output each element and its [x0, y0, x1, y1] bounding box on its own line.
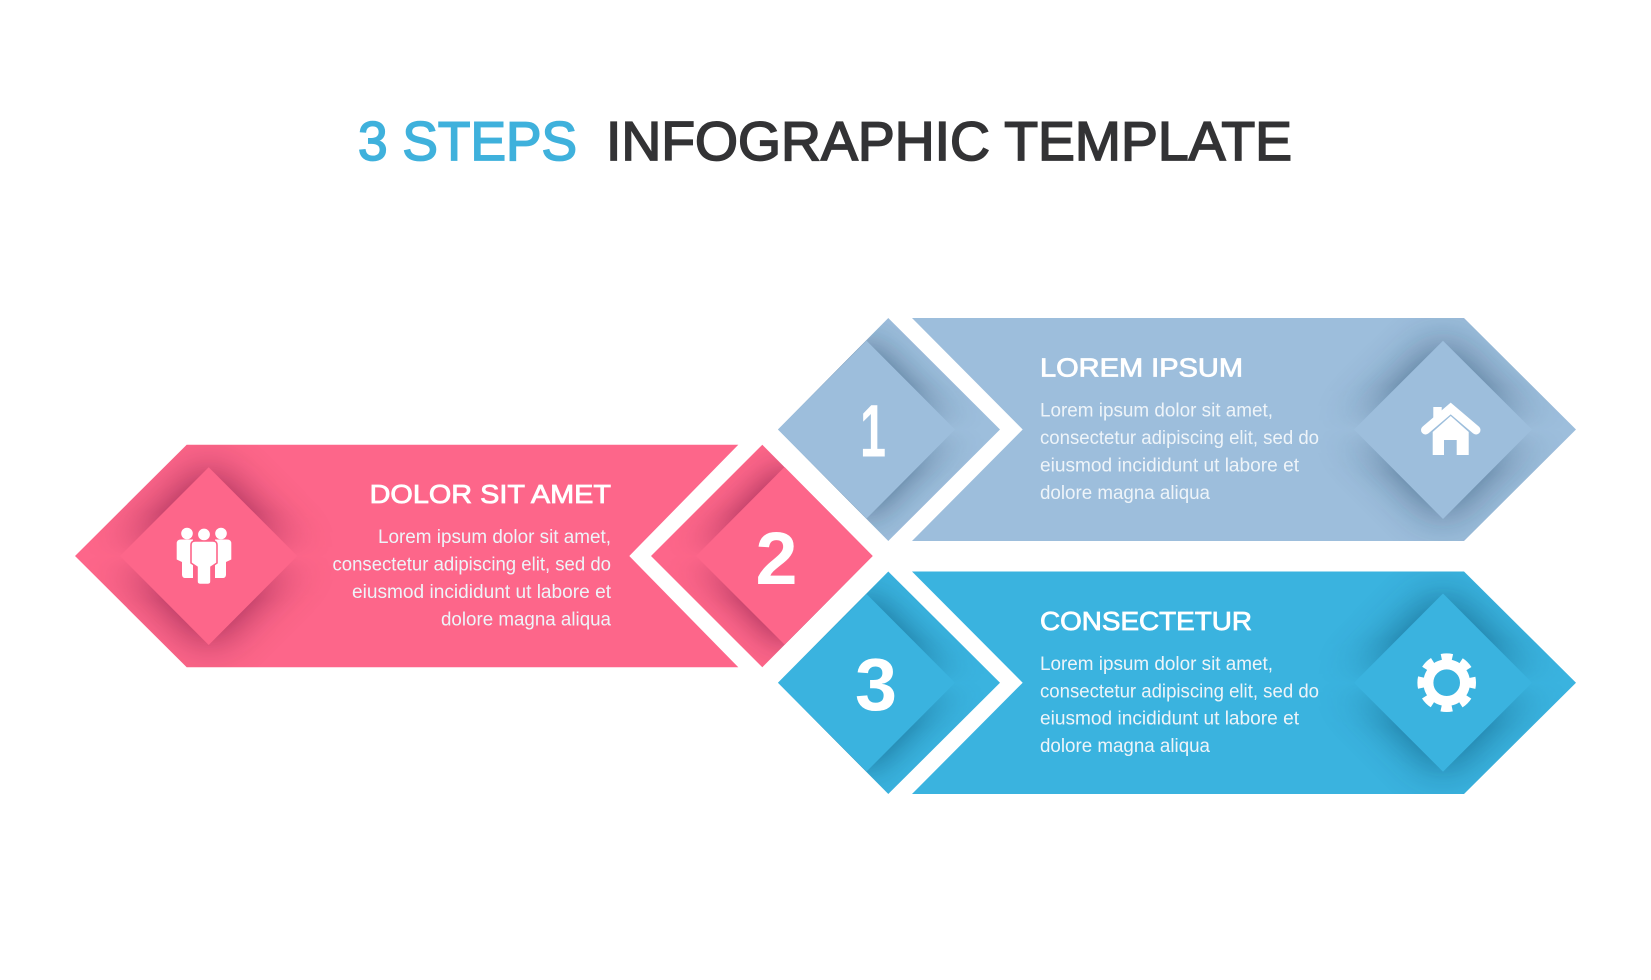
text block: step 2: dolore magna aliqua	[441, 609, 611, 630]
text block: step 3: dolore magna aliqua	[1040, 736, 1210, 757]
icon diamond: step 1	[1354, 341, 1532, 519]
heading: dolor sit amet: DOLOR SIT AMET	[370, 479, 611, 509]
text block: step 2: eiusmod incididunt ut labore et	[352, 582, 612, 603]
inner number diamond: step 3	[778, 594, 955, 772]
number diamond: step 1	[778, 318, 1000, 541]
shadow: step 2 number diamond shadow	[696, 467, 873, 644]
band: step 2 arrow	[75, 445, 738, 667]
text block: step 1: dolore magna aliqua	[1040, 483, 1210, 504]
text block: step 3: Lorem ipsum dolor sit amet,	[1040, 654, 1273, 675]
icon diamond: step 2	[120, 467, 297, 645]
shadow: step 1 number diamond shadow	[778, 341, 955, 518]
heading: consectetur: CONSECTETUR	[1040, 606, 1252, 636]
panel: step 1 lorem ipsum	[778, 318, 1576, 541]
panel: step 2 dolor sit amet	[75, 445, 873, 667]
icon: people	[177, 528, 231, 584]
icon: gear	[1421, 657, 1472, 708]
title: 3 steps: 3 STEPS	[358, 110, 577, 172]
inner number diamond: step 2	[696, 467, 873, 644]
number 2: 2	[756, 517, 798, 600]
text block: step 3: consectetur adipiscing elit, sed do	[1040, 681, 1319, 702]
number 1: 1	[860, 390, 886, 473]
text block: step 1: eiusmod incididunt ut labore et	[1040, 456, 1300, 476]
number diamond: step 2	[651, 445, 873, 667]
band: step 1 arrow	[912, 318, 1576, 541]
band: step 3 arrow	[912, 572, 1576, 794]
shadow: step 3 number diamond shadow	[778, 594, 955, 772]
text block: step 1	[1040, 401, 1319, 504]
heading: lorem ipsum: LOREM IPSUM	[1040, 353, 1243, 383]
icon: house	[1426, 407, 1476, 455]
text block: step 2: consectetur adipiscing elit, sed do	[332, 555, 611, 576]
shadow: step 1 icon diamond shadow	[1354, 341, 1532, 519]
text block: step 1: consectetur adipiscing elit, sed do	[1040, 428, 1319, 449]
text block: step 1: Lorem ipsum dolor sit amet,	[1040, 401, 1273, 422]
number 3: 3	[855, 643, 897, 726]
title: infographic template: INFOGRAPHIC TEMPLATE	[606, 110, 1292, 172]
text block: step 2: Lorem ipsum dolor sit amet,	[378, 527, 611, 548]
panel: step 3 consectetur	[778, 572, 1576, 794]
text block: step 3: eiusmod incididunt ut labore et	[1040, 709, 1300, 730]
number diamond: step 3	[778, 572, 1000, 794]
title	[358, 110, 1292, 172]
icon diamond: step 3	[1354, 594, 1532, 772]
shadow: step 3 icon diamond shadow	[1354, 594, 1532, 772]
inner number diamond: step 1	[778, 341, 955, 518]
shadow: step 2 icon diamond shadow	[120, 467, 297, 645]
text block: step 2	[332, 527, 612, 630]
text block: step 3	[1040, 654, 1319, 757]
